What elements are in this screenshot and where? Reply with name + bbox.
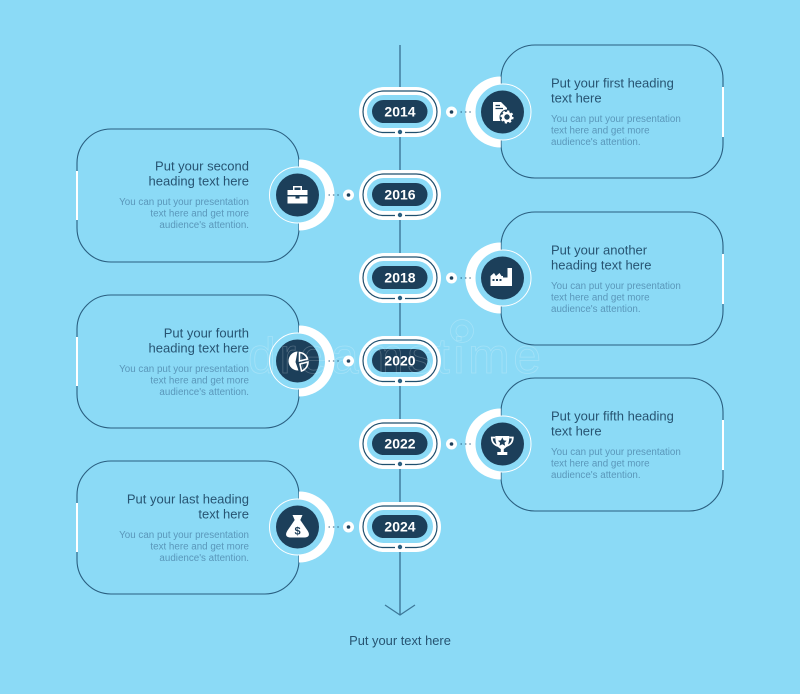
panel: fourth heading card <box>77 295 299 428</box>
text block: fourth: You can put your presentation <box>119 364 249 375</box>
text block: fourth: text here and get more <box>150 376 250 386</box>
connector 2020 <box>328 356 354 366</box>
year badge 2014 <box>359 87 441 137</box>
timeline axis with arrow <box>385 45 415 615</box>
heading: second: heading text here <box>149 174 249 188</box>
heading: last: text here <box>198 506 249 522</box>
year badge 2024 <box>359 502 441 552</box>
heading: last: Put your last heading <box>127 492 249 506</box>
year label: 2014 <box>384 104 416 120</box>
text block: third: text here and get more <box>551 292 650 304</box>
icon: money bag: $ <box>294 526 301 538</box>
icon: factory <box>465 242 531 314</box>
year label: 2018 <box>384 270 416 286</box>
year label: 2020 <box>384 352 416 368</box>
year badge 2022 <box>359 419 441 469</box>
text block: first: text here and get more <box>551 126 650 136</box>
heading: third: Put your another <box>551 242 647 258</box>
heading: fifth: Put your fifth heading <box>551 408 674 424</box>
panel: third heading card <box>501 212 723 345</box>
year badge 2020 <box>359 336 441 386</box>
heading: third: heading text here <box>551 258 651 272</box>
panel: first heading card <box>501 45 723 178</box>
text block: first: You can put your presentation <box>551 114 681 125</box>
text block: fourth: audience's attention. <box>159 387 249 398</box>
icon: document with gear <box>465 76 531 148</box>
heading: first: Put your first heading <box>551 76 674 90</box>
watermark: dreamstime <box>248 328 541 384</box>
panel: second heading card <box>77 129 299 262</box>
text block: fifth: audience's attention. <box>551 470 641 481</box>
text block: last: text here and get more <box>150 542 250 552</box>
heading: second: Put your second <box>155 158 249 174</box>
text block: last: You can put your presentation <box>119 530 249 541</box>
connector 2024 <box>328 522 354 532</box>
year label: 2024 <box>384 518 416 534</box>
panel: fifth heading card <box>501 378 723 511</box>
heading: fourth: Put your fourth <box>164 326 249 340</box>
text block: first: audience's attention. <box>551 137 641 148</box>
year badge 2016 <box>359 170 441 220</box>
connector 2014 <box>446 106 472 118</box>
text block: second: audience's attention. <box>159 220 249 231</box>
text block: second: text here and get more <box>150 208 250 220</box>
panel: last heading card <box>77 461 299 594</box>
connector 2018 <box>446 272 472 284</box>
text block: third: audience's attention. <box>551 304 641 315</box>
icon: trophy <box>465 408 531 480</box>
icon: briefcase <box>270 160 334 230</box>
icon: pie chart <box>270 326 334 396</box>
connector 2022 <box>446 438 472 450</box>
icon: money bag <box>270 492 334 562</box>
heading: fifth: text here <box>551 424 602 438</box>
connector 2016 <box>328 190 354 200</box>
year badge 2018 <box>359 253 441 303</box>
text block: fifth: text here and get more <box>551 458 650 470</box>
heading: fourth: heading text here <box>149 340 249 356</box>
caption: Put your text here <box>349 633 451 648</box>
year label: 2016 <box>384 186 416 202</box>
text block: fifth: You can put your presentation <box>551 447 681 458</box>
text block: third: You can put your presentation <box>551 281 681 292</box>
heading: first: text here <box>551 90 602 106</box>
text block: last: audience's attention. <box>159 553 249 564</box>
text block: second: You can put your presentation <box>119 197 249 208</box>
year label: 2022 <box>384 436 416 452</box>
